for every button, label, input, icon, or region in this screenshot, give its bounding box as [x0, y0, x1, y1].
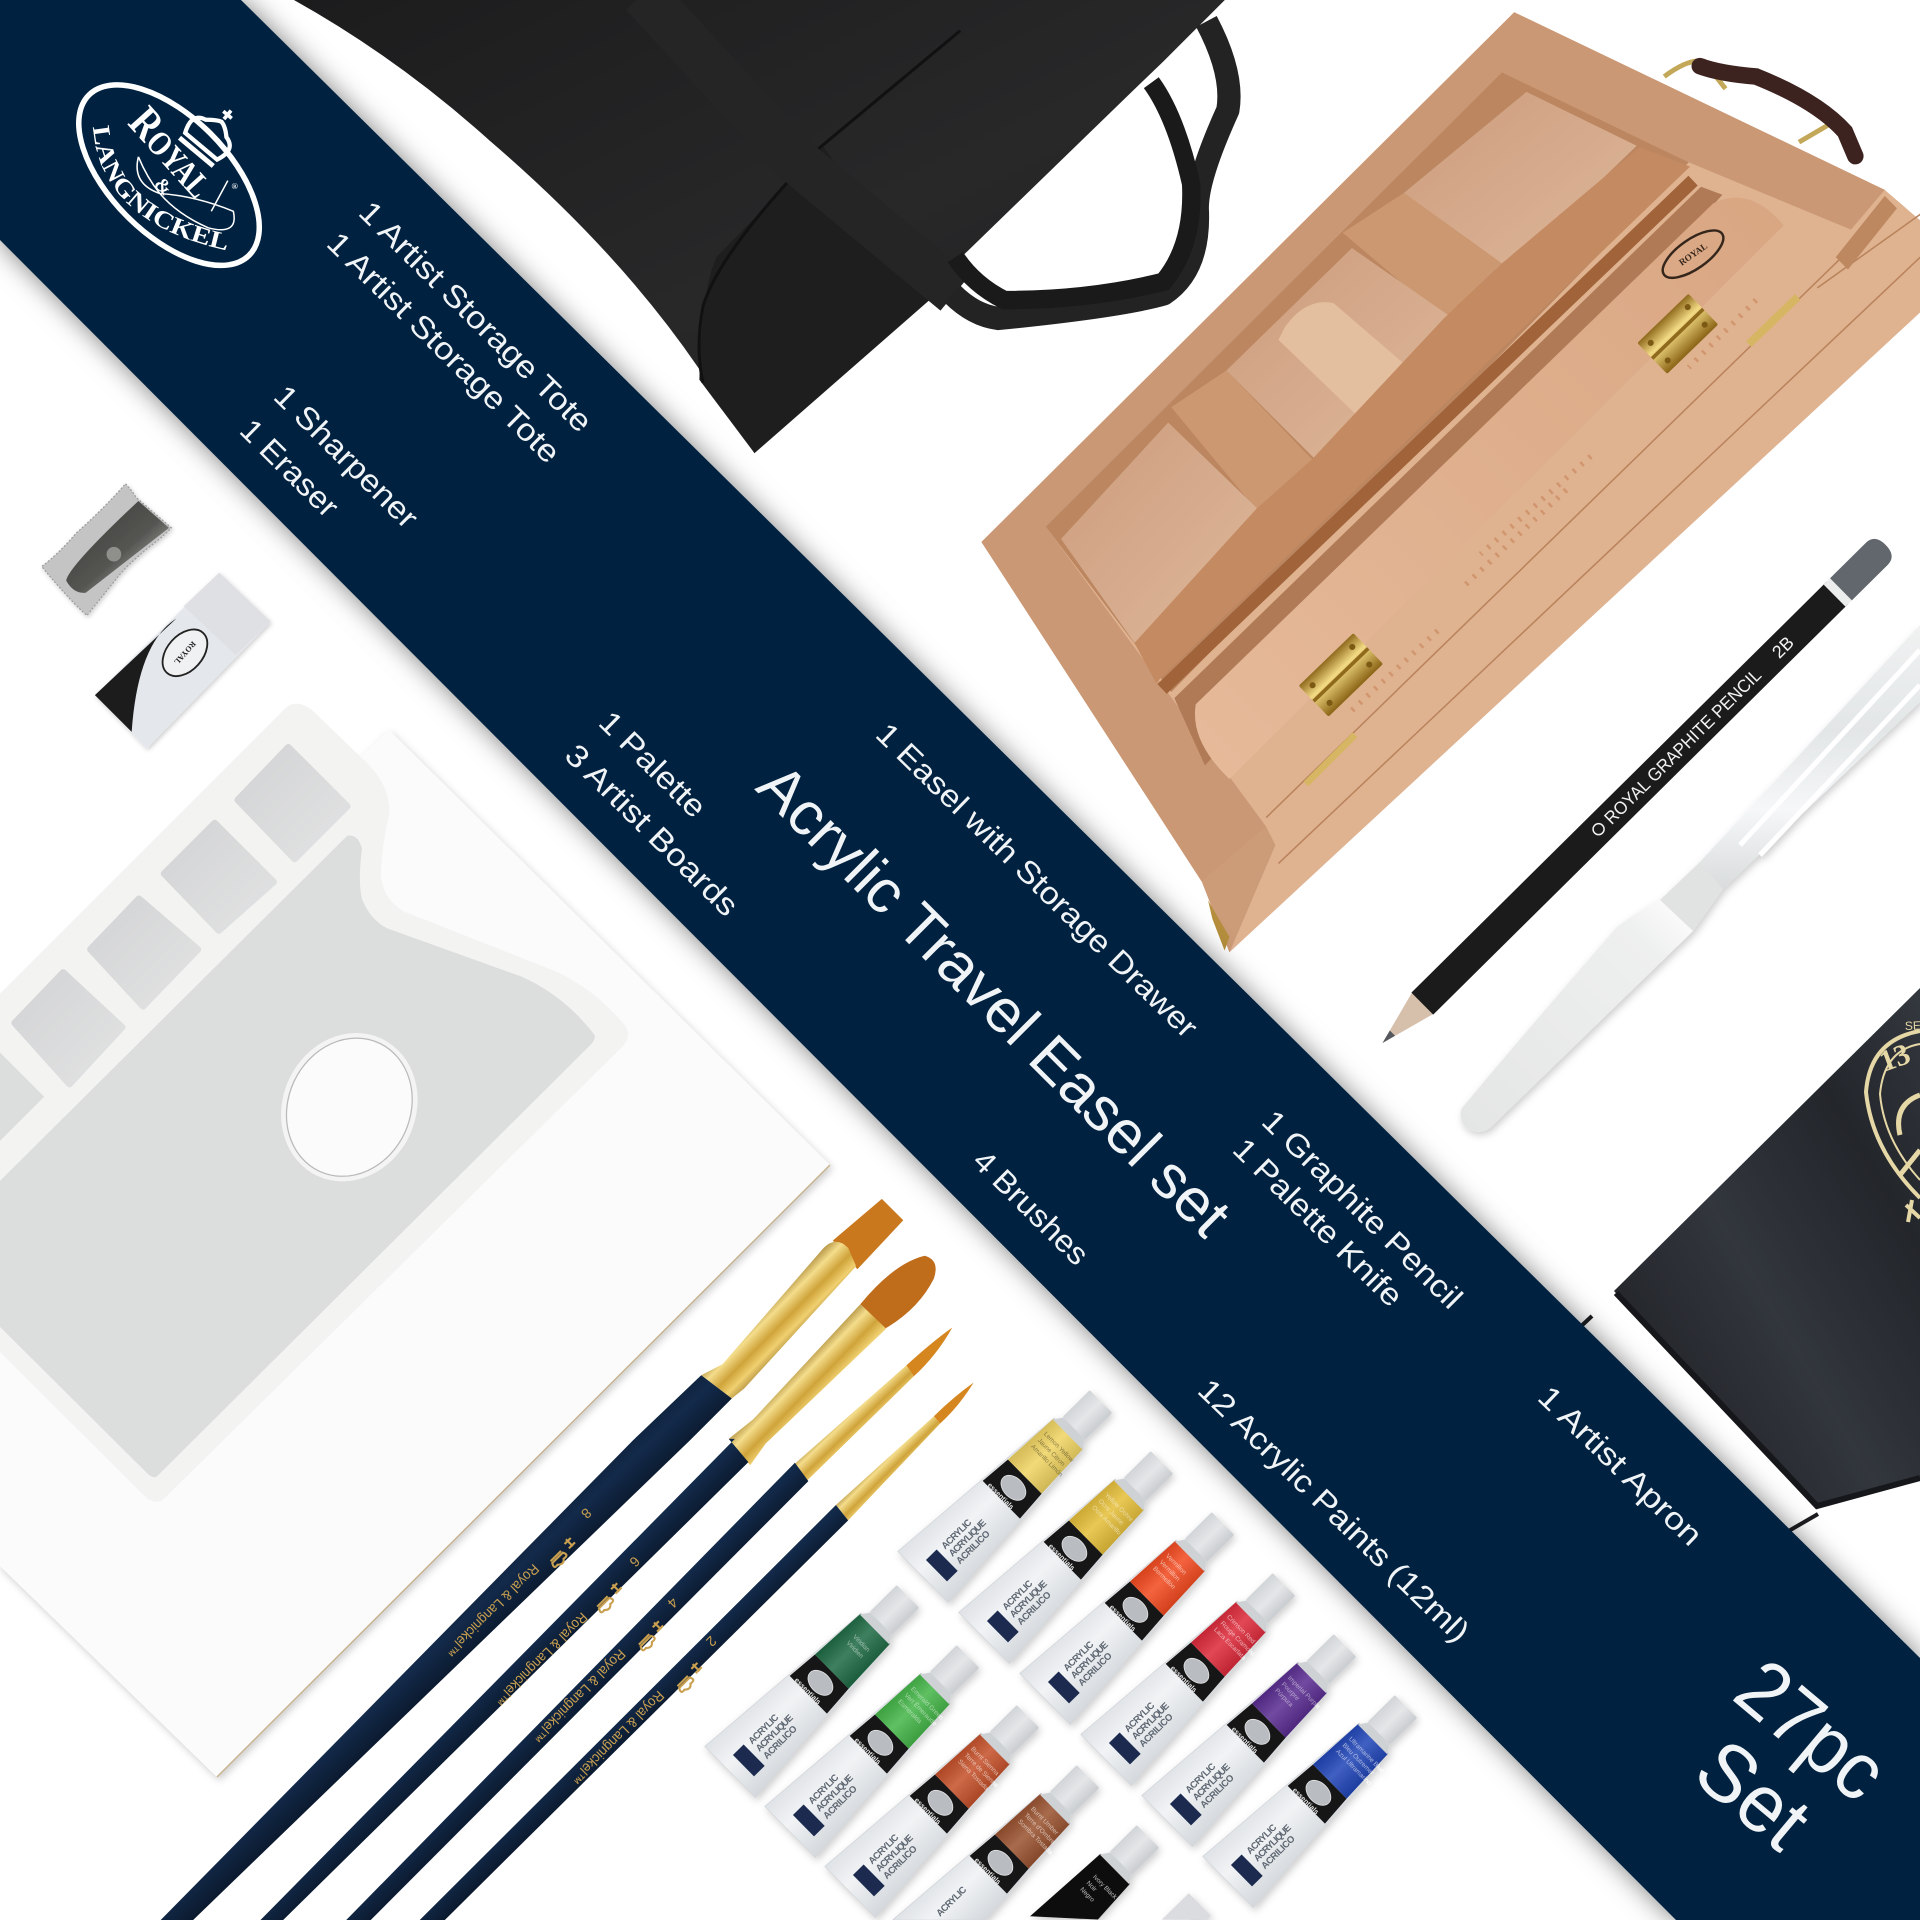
tube: crimson red — [1081, 1559, 1309, 1786]
tube: burnt sienna: Burnt Sienna — [969, 1746, 1000, 1777]
logo brush flourish — [137, 157, 234, 230]
small well four — [15, 973, 122, 1084]
tube: viridian: Viridien — [845, 1640, 865, 1660]
tube: burnt umber: Burnt Umber — [1029, 1806, 1060, 1837]
pencil label: ROYAL GRAPHITE PENCIL — [1600, 665, 1765, 828]
eraser top shade — [184, 573, 271, 655]
eraser logo — [154, 621, 216, 685]
easel logo — [1656, 222, 1731, 287]
tube: vermilion — [1020, 1498, 1248, 1725]
canvas raw edge — [217, 1165, 830, 1777]
tube: burnt sienna: Siena Tostada — [956, 1758, 990, 1792]
logo ROYAL text: ROYAL — [119, 97, 225, 207]
label: 3 artist boards: 3 Artist Boards — [558, 737, 745, 923]
tube: viridian — [705, 1571, 933, 1798]
label: 1 eraser: 1 Eraser — [233, 412, 346, 524]
tube: emerald green: Vert Émeraude — [903, 1691, 939, 1728]
label: 1 palette: 1 Palette — [592, 704, 713, 825]
tube: ultramarine blue: Azul Ultramarino — [1334, 1748, 1373, 1787]
tube: emerald green: essentials — [853, 1737, 882, 1766]
tube: burnt umber: essentials — [973, 1857, 1002, 1886]
panel bottom — [1061, 423, 1257, 643]
tube: burnt sienna: essentials — [913, 1797, 942, 1826]
tube: yellow ochre: Yellow Ochre — [1103, 1492, 1135, 1524]
brush size 4: 4 — [664, 1594, 681, 1611]
brush size 6: Royal & Langnickel™ — [491, 1609, 591, 1709]
pencil wood tip — [1372, 991, 1435, 1054]
tube: purple: ACRYLIC — [1183, 1761, 1218, 1796]
tube: vermilion: essentials — [1108, 1604, 1137, 1633]
brush size 2: Royal & Langnickel™ — [568, 1688, 668, 1788]
brush size 6: 6 — [626, 1553, 643, 1570]
tube: crimson red: ACRILICO — [1137, 1712, 1176, 1750]
easel body — [981, 12, 1920, 952]
tube: burnt sienna: ACRYLIC — [866, 1832, 901, 1867]
small well two — [164, 823, 274, 930]
tube: viridian: ACRYLIQUE — [754, 1713, 796, 1754]
thumb hole lip — [257, 1010, 442, 1204]
logo oval — [47, 53, 291, 297]
acrylic paint tubes — [705, 1376, 1431, 1920]
pencil cap — [1830, 534, 1897, 600]
side hinge right — [1749, 297, 1798, 344]
tube: lemon yellow: ACRYLIC — [939, 1517, 974, 1552]
panel top — [1404, 92, 1637, 276]
brush size 6 — [260, 1256, 936, 1920]
tube: crimson red: Crimson Red — [1225, 1614, 1257, 1646]
brand logo — [76, 82, 262, 268]
corner base block — [1202, 827, 1275, 952]
upper hinge — [1637, 294, 1718, 374]
palette rim — [0, 704, 628, 1502]
set count: 27pc: 27pc — [1718, 1642, 1904, 1818]
tube: yellow ochre — [959, 1437, 1187, 1664]
label: 1 artist apron: 1 Artist Apron — [1531, 1379, 1709, 1553]
tube: burnt sienna: ACRILICO — [881, 1844, 920, 1882]
sharpener screw — [107, 547, 121, 562]
tube: purple: ACRYLIQUE — [1191, 1762, 1233, 1803]
tube: ultramarine blue: essentials — [1291, 1787, 1320, 1816]
tube: yellow ochre: ACRILICO — [1015, 1590, 1054, 1628]
sharpener — [42, 484, 171, 615]
brush size 2 — [419, 1383, 974, 1920]
tube: ivory black: Ivory Black — [1091, 1874, 1119, 1901]
wood speckle — [1352, 300, 1756, 710]
tube: emerald green — [765, 1631, 993, 1858]
tube: lemon yellow: ACRILICO — [954, 1529, 993, 1567]
knife handle highlights — [1740, 650, 1920, 855]
apron hem — [1616, 1293, 1920, 1506]
brush size 4: Royal & Langnickel™ — [529, 1646, 629, 1746]
tube: yellow ochre: ACRYLIC — [1000, 1578, 1035, 1613]
palette — [0, 704, 628, 1502]
tube: lemon yellow: ACRYLIQUE — [947, 1518, 989, 1559]
tube: burnt umber: ACRYLIC — [934, 1884, 969, 1919]
small well three — [90, 899, 198, 1006]
tube: purple: Pourpre — [1280, 1681, 1301, 1703]
logo ampersand: & — [150, 174, 176, 200]
tube: ultramarine blue — [1203, 1681, 1431, 1908]
tube: burnt sienna: ACRYLIQUE — [874, 1833, 916, 1874]
drawer slat seams — [1266, 214, 1920, 863]
tube: lemon yellow: Jaune Citron — [1036, 1437, 1066, 1468]
tube: emerald green: ACRILICO — [821, 1784, 860, 1822]
title: Acrylic Travel Easel set — [745, 750, 1244, 1249]
eraser — [95, 573, 271, 748]
palette knife — [1461, 625, 1920, 1132]
tube: yellow ochre: Ocre Jaune — [1097, 1498, 1125, 1527]
tube: yellow ochre: ACRYLIQUE — [1008, 1579, 1050, 1620]
tube: ultramarine blue: ACRILICO — [1259, 1834, 1298, 1872]
tube: crimson red: essentials — [1169, 1665, 1198, 1694]
wooden easel — [981, 12, 1920, 952]
pencil band — [1824, 578, 1852, 607]
tube: burnt umber: Terre d'Ombre — [1023, 1812, 1057, 1846]
tube: burnt umber — [893, 1752, 1109, 1920]
tube: purple: ACRILICO — [1198, 1773, 1237, 1811]
brush size 8: 8 — [578, 1505, 595, 1522]
label: 1 graphite pencil: 1 Graphite Pencil — [1255, 1103, 1469, 1316]
thumb hole — [264, 1017, 435, 1197]
tote bag — [294, 0, 1229, 453]
drawer gap — [1174, 187, 1722, 766]
pencil grade: 2B — [1768, 632, 1798, 662]
apron tie — [1780, 1514, 1818, 1536]
logo crown — [178, 95, 249, 167]
tube: burnt sienna: Terre de Sienne — [963, 1752, 1000, 1789]
small well one — [238, 747, 347, 859]
tube: viridian: ACRILICO — [761, 1724, 800, 1762]
artist boards canvas — [0, 730, 830, 1777]
ledge rail — [1135, 147, 1690, 683]
label: 4 brushes: 4 Brushes — [966, 1143, 1096, 1272]
palette main well — [0, 835, 595, 1477]
eraser logo: ROYAL — [172, 639, 198, 666]
tube: yellow ochre: Ocre Amarillo — [1090, 1504, 1122, 1537]
label: 1 artist storage tote, second line: 1 Artist Storage Tote — [320, 225, 567, 470]
tube: viridian: essentials — [793, 1677, 822, 1706]
tube: viridian: ACRYLIC — [746, 1712, 781, 1747]
drawer plate — [1195, 198, 1784, 779]
label: 1 sharpener: 1 Sharpener — [267, 378, 425, 535]
eraser body — [95, 573, 271, 748]
bag body — [294, 0, 1225, 453]
brush size 8: Royal & Langnickel™ — [442, 1561, 543, 1660]
gold corner fitting — [1208, 900, 1229, 950]
tube: titanium white cap — [1162, 1893, 1211, 1920]
tube: vermilion: ACRILICO — [1076, 1651, 1115, 1689]
tube: lemon yellow — [898, 1376, 1126, 1603]
pencil lead — [1380, 1031, 1395, 1046]
tube: purple: Imperial Purple — [1286, 1675, 1322, 1711]
label: 1 artist storage tote, first line: 1 Artist Storage Tote — [352, 194, 599, 439]
tube: vermilion: ACRYLIQUE — [1069, 1640, 1111, 1681]
outer handle — [952, 21, 1229, 318]
tube: emerald green: ACRYLIQUE — [814, 1773, 856, 1814]
inner recess — [1046, 72, 1689, 692]
rail dark edge — [1162, 181, 1693, 689]
bag flap — [699, 147, 931, 453]
tube: purple: Púrpura — [1273, 1687, 1295, 1709]
tube: ivory black: Noir — [1085, 1880, 1099, 1894]
logo registered mark: ® — [231, 181, 238, 191]
tube: ultramarine blue: Ultramarine Blue — [1347, 1736, 1386, 1775]
tube: lemon yellow: essentials — [986, 1482, 1015, 1511]
pencil body — [1411, 582, 1848, 1015]
brush size 2: 2 — [703, 1633, 720, 1650]
set count: Set: Set — [1678, 1722, 1827, 1868]
tube: vermilion: ACRYLIC — [1061, 1639, 1096, 1674]
carry handle — [1664, 61, 1855, 156]
tube: vermilion: Bermellón — [1151, 1565, 1177, 1591]
tube: lemon yellow: Amarillo Limón — [1029, 1443, 1064, 1479]
tube: crimson red: ACRYLIC — [1122, 1700, 1157, 1735]
wooden tab — [1278, 302, 1408, 416]
tube: purple — [1142, 1620, 1370, 1847]
knife collar — [1660, 862, 1723, 931]
apron gold heart emblem — [1866, 1031, 1920, 1222]
tube: ultramarine blue: Bleu Outremer — [1341, 1742, 1375, 1777]
tube: emerald green: Esmeralda — [896, 1698, 923, 1725]
tube: ultramarine blue: ACRYLIQUE — [1252, 1823, 1294, 1864]
crossbar upper — [1343, 193, 1502, 318]
side hinge left — [1306, 735, 1355, 784]
tube: crimson red: Laca Escarlata — [1212, 1626, 1247, 1662]
small well five — [0, 1052, 44, 1141]
tube: burnt umber: Sombra Tostada — [1016, 1818, 1054, 1857]
brush size 4 — [346, 1327, 952, 1920]
label: 1 palette knife: 1 Palette Knife — [1226, 1131, 1410, 1314]
tube: ultramarine blue: ACRYLIC — [1244, 1822, 1279, 1857]
frame — [981, 12, 1885, 882]
easel joint block — [1836, 196, 1897, 269]
knife blade — [1461, 900, 1693, 1132]
tube: vermilion: Vermilion — [1164, 1553, 1188, 1577]
panel middle — [1226, 248, 1453, 459]
bag flap seam — [699, 31, 960, 383]
logo LANGNICKEL text: LANGNICKEL — [92, 125, 227, 250]
sharpener casing — [42, 484, 171, 615]
tube: vermilion: Vermillon — [1158, 1559, 1181, 1583]
brushes — [160, 1199, 974, 1920]
eraser sleeve black — [95, 619, 176, 732]
pencil crown icon — [1591, 821, 1606, 837]
tube: lemon yellow: Lemon Yellow — [1042, 1431, 1075, 1464]
tube: emerald green: ACRYLIC — [806, 1772, 841, 1807]
easel logo: ROYAL — [1677, 241, 1709, 268]
tube: ivory black: Negro — [1078, 1886, 1096, 1904]
apron fabric — [1614, 988, 1920, 1508]
graphite pencil — [1372, 534, 1897, 1054]
knife handle — [1700, 625, 1920, 889]
tube: ivory black — [1030, 1818, 1165, 1920]
sharpener blade — [66, 501, 169, 593]
tube: viridian: Viridian — [851, 1634, 871, 1654]
apron emblem text: 13 — [1875, 1037, 1915, 1079]
crossbar lower — [1171, 371, 1312, 514]
tube: crimson red: ACRYLIQUE — [1130, 1701, 1172, 1742]
tube: yellow ochre: essentials — [1047, 1543, 1076, 1572]
brush size 8 — [160, 1199, 903, 1920]
artist apron — [1577, 988, 1920, 1536]
apron tie upper — [1577, 1316, 1592, 1330]
inner handle — [955, 83, 1191, 300]
tube: crimson red: Rouge Cramoisi — [1219, 1620, 1256, 1658]
label: 12 acrylic paints: 12 Acrylic Paints (12ml) — [1191, 1372, 1477, 1649]
tube: emerald green: Emerald Green — [909, 1686, 945, 1722]
lower hinge — [1299, 633, 1383, 717]
tube: burnt sienna — [825, 1691, 1053, 1918]
tube: purple: essentials — [1230, 1726, 1259, 1755]
front strap — [643, 0, 955, 293]
label: 1 easel with storage drawer: 1 Easel with Storage Drawer — [869, 716, 1205, 1045]
